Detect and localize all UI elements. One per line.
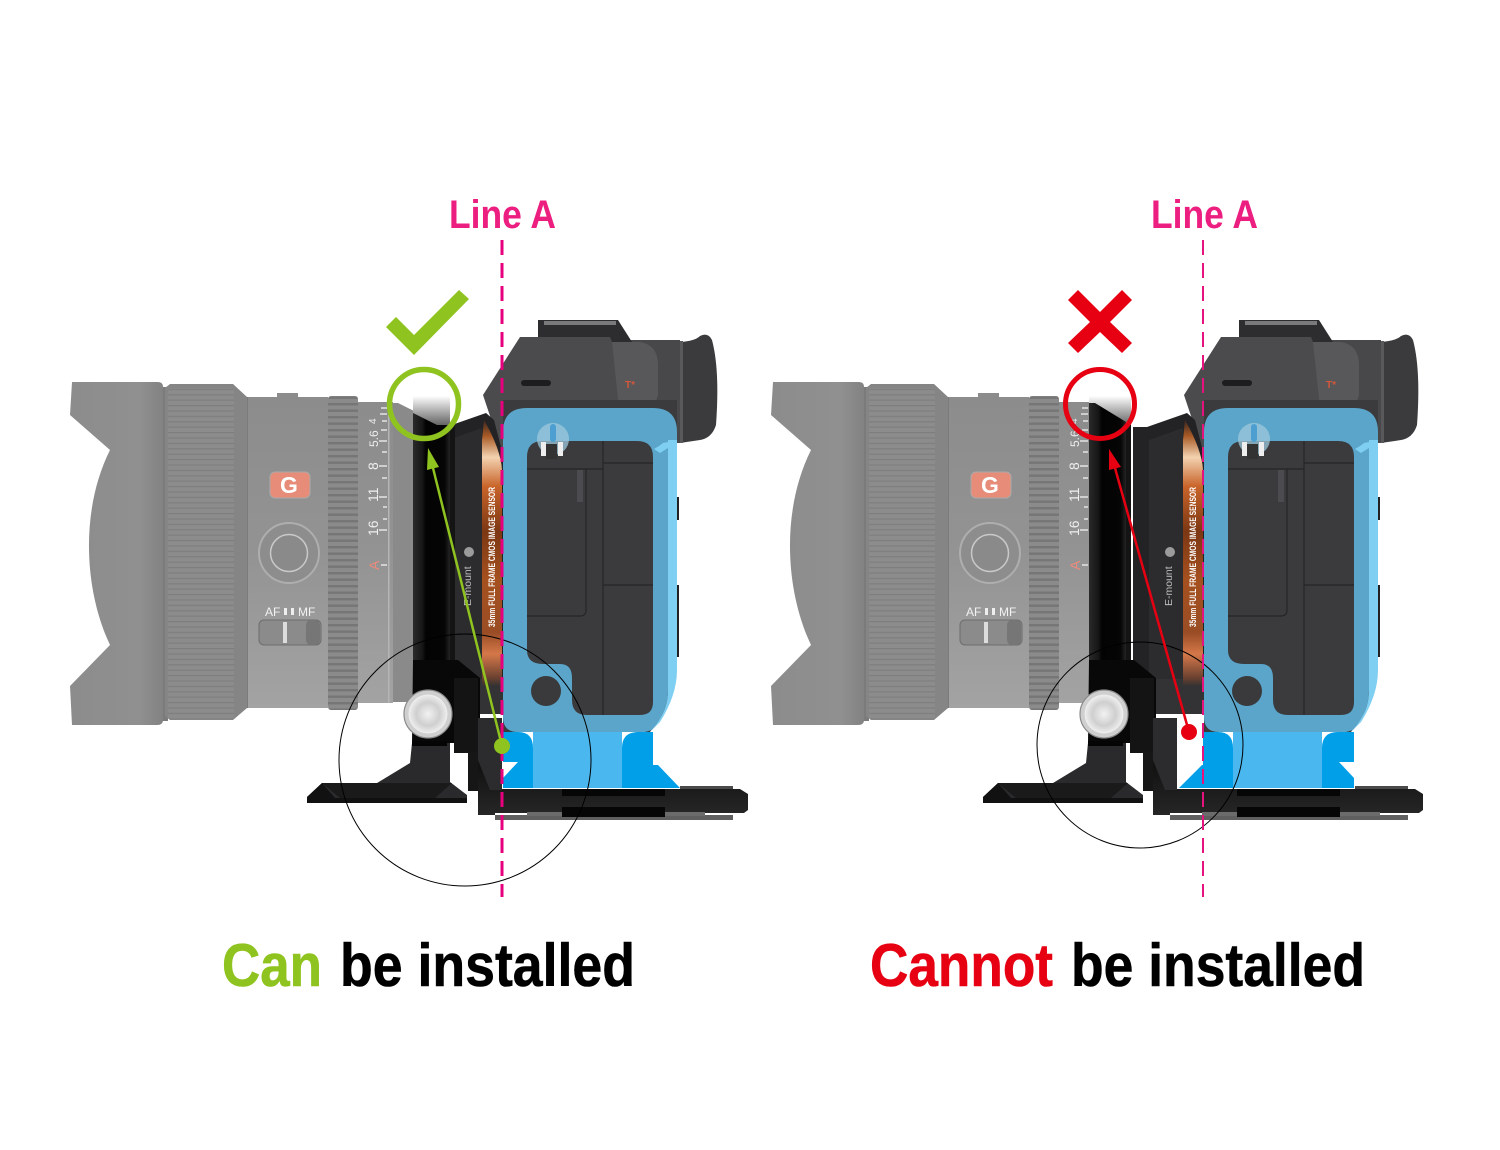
aperture scale: 8 [1066, 462, 1082, 470]
caption [870, 932, 1365, 999]
lens brand G: G [280, 472, 298, 498]
lens [70, 382, 420, 725]
aperture scale: 11 [1066, 487, 1082, 502]
caption: Cannot [870, 932, 1053, 999]
T star mark: T* [625, 380, 635, 391]
aperture scale: 16 [1066, 520, 1082, 536]
L bracket [468, 718, 748, 820]
AF MF label: MF [999, 605, 1016, 619]
aperture scale: 5.6 [1068, 430, 1082, 447]
aperture scale: A [366, 560, 382, 570]
T star mark: T* [1326, 380, 1336, 391]
black detail circle [339, 634, 591, 886]
lens brand G: G [981, 472, 999, 498]
caption [222, 932, 635, 999]
camera body [432, 320, 717, 732]
adapter top fade [413, 396, 450, 425]
green highlight circle [390, 370, 458, 438]
red arrow [1109, 449, 1197, 740]
Line A label: Line A [1151, 193, 1258, 237]
caption: Can [222, 932, 322, 999]
AF MF label [265, 605, 315, 619]
blue cage frame [503, 408, 677, 732]
camera body [1133, 320, 1418, 732]
lens [771, 382, 1121, 725]
blue lower part [503, 732, 680, 788]
adapter and foot [307, 397, 480, 803]
mount text: E-mount [462, 566, 474, 606]
red highlight circle [1066, 370, 1134, 438]
AF MF label: AF [265, 605, 280, 619]
aperture scale: A [1067, 560, 1083, 570]
mount text: E-mount [1163, 566, 1175, 606]
blue lower part [1179, 732, 1354, 788]
aperture scale: 4 [1069, 418, 1080, 424]
sensor text: 35mm FULL FRAME CMOS IMAGE SENSOR [1188, 487, 1199, 627]
blue cage frame [1204, 408, 1378, 732]
check mark [386, 290, 469, 355]
aperture scale [1066, 418, 1083, 570]
aperture scale: 8 [365, 462, 381, 470]
aperture scale: 16 [365, 520, 381, 536]
caption: be installed [1071, 932, 1365, 999]
AF MF label: AF [966, 605, 981, 619]
dashed line A [500, 240, 504, 897]
AF MF label [966, 605, 1016, 619]
Line A label: Line A [449, 193, 556, 237]
black detail circle [1037, 642, 1243, 848]
caption: be installed [340, 932, 635, 999]
cross mark [1068, 290, 1132, 353]
aperture scale: 11 [365, 487, 381, 502]
aperture scale [365, 418, 382, 570]
aperture scale: 4 [368, 418, 379, 424]
adapter top fade [1089, 396, 1131, 425]
panel: can be installed [70, 193, 748, 999]
sensor text: 35mm FULL FRAME CMOS IMAGE SENSOR [487, 487, 498, 627]
panel: cannot be installed [771, 193, 1423, 999]
green arrow [427, 448, 510, 754]
AF MF label: MF [298, 605, 315, 619]
L bracket [1143, 718, 1423, 820]
dashed line A [1202, 240, 1204, 897]
adapter and foot [983, 397, 1156, 803]
aperture scale: 5.6 [367, 430, 381, 447]
